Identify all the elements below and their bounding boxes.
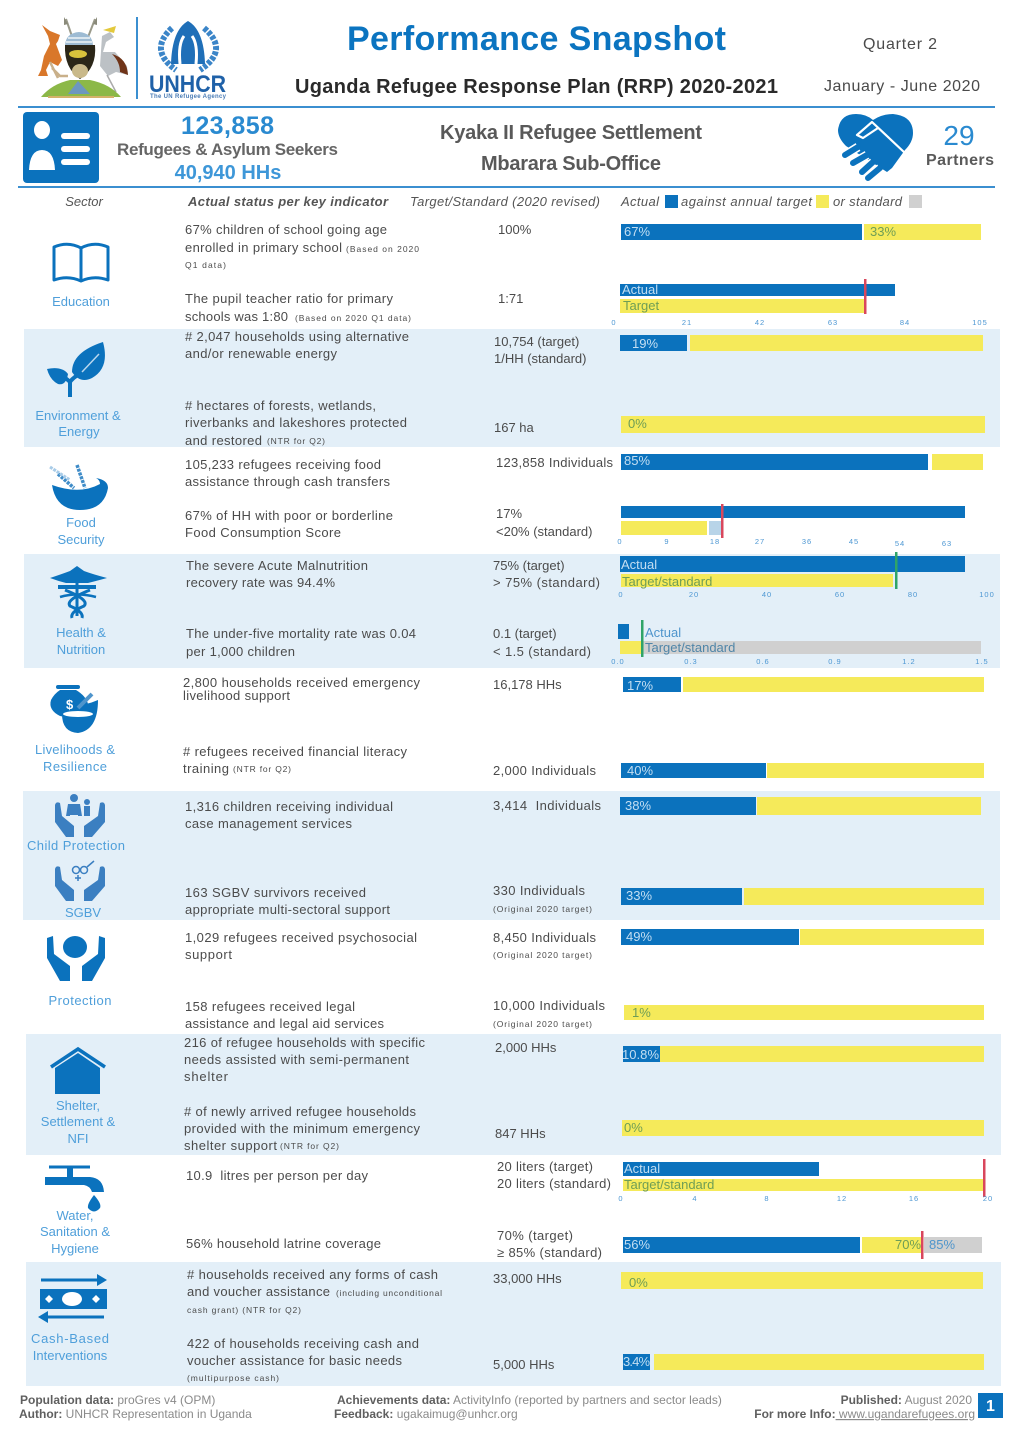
indicators: Education: (Based on 2020 — [346, 244, 419, 254]
targets: Health & Nutrition: 0.1 (target) — [493, 626, 557, 641]
chart: litres per person — [618, 1159, 993, 1203]
icon: water tap — [49, 1166, 90, 1168]
sector: Shelter: Settlement & — [41, 1114, 116, 1129]
sector: Shelter — [41, 1049, 116, 1146]
sector: Education: Education — [52, 294, 110, 309]
chart: under-five mortality: 1.2 — [902, 657, 916, 666]
indicators: Child Protection and SGBV: 163 SGBV survivors received — [185, 885, 366, 900]
rule bottom — [18, 186, 995, 188]
chart: SAM recovery rate: 80 — [908, 590, 918, 599]
logo: UNHCR: UNHCR — [149, 71, 226, 98]
targets: Environment & Energy: 1/HH (standard) — [494, 351, 586, 366]
chart: legal assistance bar — [624, 1005, 984, 1020]
indicators: WASH: 56% household latrine coverage — [186, 1236, 381, 1251]
icon: caduceus — [50, 566, 107, 583]
population figures: 40,940 HHs — [175, 162, 281, 184]
indicators: Environment & Energy: and/or renewable energy — [185, 346, 338, 361]
population figures: Refugees & Asylum Seekers — [117, 140, 338, 159]
panel: cash band — [26, 1262, 1001, 1386]
indicators: Education — [185, 222, 419, 324]
footer: achievements and feedback: Achievements data: ActivityInfo (reported by partners and sector leads) — [337, 1393, 722, 1407]
indicators: Cash-Based Interventions: # households received any forms of cash — [187, 1267, 438, 1282]
sector: Shelter: NFI — [68, 1131, 88, 1146]
icon: bowl with grain — [52, 478, 108, 510]
targets: Child Protection and SGBV: (Original 2020 target) — [493, 904, 592, 914]
chart: under-five mortality: 1.5 — [975, 657, 989, 666]
targets: Education — [498, 222, 532, 306]
targets: Cash-Based Interventions — [493, 1271, 562, 1372]
chart: under-five mortality: 0.6 — [756, 657, 770, 666]
sector: SGBV: SGBV — [65, 905, 101, 920]
chart: food consumption score: 9 — [664, 537, 670, 546]
chart: legal assistance bar: 1% — [632, 1005, 651, 1020]
chart: pupil teacher ratio: Actual — [622, 282, 658, 297]
chart: SGBV support bar: 33% — [626, 888, 652, 903]
indicators: Livelihoods — [183, 675, 420, 776]
sector: Environment & Energy — [35, 342, 121, 439]
chart: emergency support bar: 17% — [627, 678, 653, 693]
chart: litres per person: 8 — [764, 1194, 770, 1203]
partners: Partners — [926, 152, 994, 169]
panel: environment band — [24, 329, 1000, 447]
chart: SAM recovery rate: 60 — [835, 590, 845, 599]
footer: publication — [754, 1393, 975, 1421]
chart: food assistance bar — [621, 453, 983, 470]
indicators: Environment & Energy — [185, 329, 409, 448]
indicators: Livelihoods: # refugees received financial literacy — [183, 744, 408, 759]
chart: under-five mortality: 0.9 — [828, 657, 842, 666]
panel: health band — [24, 554, 1000, 668]
icon: banknote and arrows — [41, 1278, 100, 1282]
indicators: Environment & Energy: # 2,047 households using alternative — [185, 329, 409, 344]
panel: shelter band — [26, 1034, 1001, 1155]
indicators: Food Security: 67% of HH with poor or borderline — [185, 508, 393, 523]
chart: cash assistance bar — [621, 1272, 983, 1290]
icon: hands and gender symbols — [55, 866, 74, 901]
targets: Shelter — [495, 1040, 557, 1141]
chart: SGBV support bar — [621, 888, 984, 905]
chart: renewable energy bar — [620, 335, 983, 351]
targets: Child Protection and SGBV: 3,414 Individuals — [493, 798, 602, 813]
period: January - June 2020 — [824, 78, 980, 95]
targets: Food Security: 17% — [496, 506, 522, 521]
population figures: 123,858 — [181, 112, 274, 140]
chart: SAM recovery rate: 0 — [618, 590, 624, 599]
settlement name — [440, 122, 702, 175]
indicators: Livelihoods: training — [183, 761, 229, 776]
footer: publication: Published: August 2020 — [841, 1393, 972, 1407]
table header: Target/Standard (2020 revised) — [410, 194, 600, 209]
chart: financial literacy bar — [621, 763, 984, 778]
sector: Child Protection — [27, 794, 125, 853]
chart: food assistance bar: 85% — [624, 453, 650, 468]
sector: WASH — [40, 1167, 110, 1256]
icon: book — [54, 244, 108, 281]
sector: Protection: Protection — [48, 993, 112, 1008]
indicators: Health & Nutrition: per 1,000 children — [186, 644, 295, 659]
chart: latrine coverage: 85% — [929, 1237, 955, 1252]
logo: Uganda coat of arms — [38, 17, 128, 97]
chart: food consumption score: 63 — [942, 539, 952, 548]
indicators: Protection — [185, 930, 417, 1031]
sector: Food Security: Security — [58, 532, 105, 547]
indicators: Food Security: 105,233 refugees receiving food — [185, 457, 381, 472]
chart: basic needs bar: 3.4% — [623, 1354, 650, 1369]
sector: Child Protection: Child Protection — [27, 838, 125, 853]
chart: cash assistance bar: 0% — [629, 1275, 648, 1290]
targets: Protection: 10,000 Individuals — [493, 998, 606, 1013]
targets: Cash-Based Interventions: 5,000 HHs — [493, 1357, 555, 1372]
sector: Livelihoods & Resilience — [35, 685, 115, 774]
sector: WASH: Water, — [56, 1208, 94, 1223]
chart: food consumption score — [617, 504, 965, 548]
targets: Protection: (Original 2020 target) — [493, 950, 592, 960]
footer: publication: For more Info: www.ugandarefugees.org — [754, 1407, 975, 1421]
chart: under-five mortality: Target/standard — [645, 640, 735, 655]
chart: enrolment bar: 33% — [870, 224, 896, 239]
chart: latrine coverage — [623, 1231, 982, 1259]
sector: Education — [52, 244, 110, 309]
table header: or standard — [833, 194, 903, 209]
chart: latrine coverage: 56% — [624, 1237, 650, 1252]
chart: psychosocial bar: 49% — [626, 929, 652, 944]
chart: SAM recovery rate: 100 — [979, 590, 995, 599]
indicators: Environment & Energy: riverbanks and lakeshores protected — [185, 415, 407, 430]
icon: plant — [62, 372, 84, 397]
chart: SAM recovery rate: 20 — [689, 590, 699, 599]
chart: litres per person: Actual — [624, 1161, 660, 1176]
targets: Shelter: 847 HHs — [495, 1126, 546, 1141]
chart: pupil teacher ratio: 63 — [828, 318, 838, 327]
targets: Health & Nutrition: < 1.5 (standard) — [493, 644, 591, 659]
indicators: Cash-Based Interventions: 422 of households receiving cash and — [187, 1336, 419, 1351]
indicators: Environment & Energy: and restored — [185, 433, 262, 448]
indicators: Cash-Based Interventions: (multipurpose cash) — [187, 1373, 279, 1383]
indicators: Protection: assistance and legal aid services — [185, 1016, 384, 1031]
targets: Child Protection and SGBV: 330 Individuals — [493, 883, 586, 898]
chart: SAM recovery rate: Target/standard — [622, 574, 712, 589]
chart: food consumption score: 27 — [755, 537, 765, 546]
chart: financial literacy bar: 40% — [627, 763, 653, 778]
title: Performance Snapshot — [347, 20, 726, 58]
table header: Actual — [620, 194, 660, 209]
sector: Livelihoods & Resilience: $ — [66, 697, 74, 712]
chart: semi-permanent shelter bar — [622, 1046, 984, 1062]
targets: Livelihoods — [493, 677, 596, 778]
targets: Food Security: 123,858 Individuals — [496, 455, 614, 470]
icon: hands and children — [55, 802, 74, 837]
chart: food consumption score: 54 — [895, 539, 905, 548]
indicators: Protection: support — [185, 947, 232, 962]
chart: case management bar — [620, 797, 981, 815]
indicators: Child Protection and SGBV: appropriate multi-sectoral support — [185, 902, 390, 917]
indicators: Livelihoods: (NTR for Q2) — [233, 764, 291, 774]
logo: UNHCR: The UN Refugee Agency — [150, 94, 227, 100]
indicators: Health & Nutrition: The under-five mortality rate was 0.04 — [186, 626, 416, 641]
indicators: Health & Nutrition: recovery rate was 94.4% — [186, 575, 335, 590]
chart: food consumption score: 45 — [849, 537, 859, 546]
indicators: Cash-Based Interventions — [187, 1267, 442, 1383]
sector: Health & Nutrition: Nutrition — [57, 642, 105, 657]
indicators: Cash-Based Interventions: voucher assistance for basic needs — [187, 1353, 402, 1368]
sector: Protection — [47, 936, 112, 1008]
partners — [926, 120, 994, 169]
chart: litres per person: Target/standard — [624, 1177, 714, 1192]
targets: Livelihoods: 2,000 Individuals — [493, 763, 596, 778]
panel: child protection band — [23, 791, 1000, 920]
quarter: Quarter 2 — [863, 36, 937, 53]
partners: 29 — [943, 120, 975, 151]
targets: Shelter: 2,000 HHs — [495, 1040, 557, 1055]
indicators: Child Protection and SGBV: case management services — [185, 816, 352, 831]
sector: Cash-Based Interventions: Interventions — [33, 1348, 108, 1363]
chart: hectares bar: 0% — [628, 416, 647, 431]
chart: semi-permanent shelter bar: 10.8% — [622, 1047, 659, 1062]
indicators: Education: schools was 1:80 — [185, 309, 288, 324]
page number — [978, 1393, 1003, 1418]
sector: Health & Nutrition: Health & — [56, 625, 106, 640]
indicators: Shelter: needs assisted with semi-permanent — [184, 1052, 409, 1067]
indicators: Shelter: shelter support — [184, 1138, 277, 1153]
footer: achievements and feedback: Feedback: ugakaimug@unhcr.org — [334, 1407, 518, 1421]
sector: WASH: Hygiene — [51, 1241, 99, 1256]
indicators: Livelihoods: 2,800 households received emergency — [183, 675, 420, 690]
targets: Food Security — [496, 455, 614, 539]
indicators: Health & Nutrition — [186, 558, 416, 659]
indicators: Child Protection and SGBV: 1,316 children receiving individual — [185, 799, 393, 814]
chart: enrolment bar: 67% — [624, 224, 650, 239]
chart: pupil teacher ratio: 84 — [900, 318, 910, 327]
chart: pupil teacher ratio: 105 — [972, 318, 988, 327]
indicators: Education: enrolled in primary school — [185, 240, 342, 255]
targets: Health & Nutrition: > 75% (standard) — [493, 575, 600, 590]
icon: person card — [23, 112, 99, 183]
chart: food consumption score: 36 — [802, 537, 812, 546]
table header: Actual status per key indicator — [187, 194, 389, 209]
sector: Food Security — [50, 465, 108, 547]
sector: Environment & Energy: Energy — [58, 424, 100, 439]
subtitle: Uganda Refugee Response Plan (RRP) 2020-2021 — [295, 76, 778, 98]
indicators: Food Security: assistance through cash transfers — [185, 474, 390, 489]
sector: Environment & Energy: Environment & — [35, 408, 121, 423]
indicators: WASH — [186, 1168, 381, 1251]
footer: data sources: Author: UNHCR Representation in Uganda — [19, 1407, 252, 1421]
indicators: Protection: 1,029 refugees received psychosocial — [185, 930, 417, 945]
sector: Shelter: Shelter, — [56, 1098, 100, 1113]
chart: hectares bar — [621, 416, 985, 433]
indicators: Shelter — [184, 1035, 426, 1153]
sector: Cash-Based Interventions — [31, 1274, 109, 1363]
targets: Protection: (Original 2020 target) — [493, 1019, 592, 1029]
chart: under-five mortality: 0.3 — [684, 657, 698, 666]
targets: Environment & Energy — [494, 334, 586, 435]
population figures — [117, 112, 338, 184]
indicators: Health & Nutrition: The severe Acute Malnutrition — [186, 558, 368, 573]
chart: SAM recovery rate: Actual — [621, 557, 657, 572]
table header: Sector — [65, 194, 103, 209]
chart: SAM recovery rate — [618, 552, 995, 599]
targets: Cash-Based Interventions: 33,000 HHs — [493, 1271, 562, 1286]
sector: WASH: Sanitation & — [40, 1224, 110, 1239]
indicators: Shelter: (NTR for Q2) — [280, 1141, 339, 1151]
sector: Livelihoods & Resilience: Livelihoods & — [35, 742, 115, 757]
targets: Health & Nutrition: 75% (target) — [493, 558, 565, 573]
indicators: Cash-Based Interventions: (including unconditional — [336, 1288, 442, 1298]
indicators: Education: (Based on 2020 Q1 data) — [295, 313, 411, 323]
rule top — [18, 106, 995, 108]
sector: SGBV — [55, 861, 105, 920]
indicators: WASH: 10.9 litres per person per day — [186, 1168, 368, 1183]
targets: WASH: 20 liters (target) — [497, 1159, 593, 1174]
indicators: Environment & Energy: (NTR for Q2) — [267, 436, 325, 446]
chart: litres per person: 4 — [692, 1194, 698, 1203]
chart: under-five mortality: Actual — [645, 625, 681, 640]
chart: pupil teacher ratio: 42 — [755, 318, 765, 327]
targets: WASH: ≥ 85% (standard) — [497, 1245, 602, 1260]
icon: house — [51, 1049, 105, 1067]
targets: WASH: 20 liters (standard) — [497, 1176, 611, 1191]
chart: pupil teacher ratio: 0 — [611, 318, 617, 327]
chart: pupil teacher ratio: 21 — [682, 318, 692, 327]
targets: Child Protection and SGBV — [493, 798, 602, 914]
targets: WASH — [497, 1159, 611, 1260]
indicators: Child Protection and SGBV — [185, 799, 393, 917]
indicators: Shelter: 216 of refugee households with specific — [184, 1035, 426, 1050]
sector: Health & Nutrition — [50, 566, 107, 657]
indicators: Shelter: # of newly arrived refugee households — [184, 1104, 416, 1119]
settlement name: Kyaka II Refugee Settlement — [440, 122, 702, 144]
targets: Food Security: <20% (standard) — [496, 524, 592, 539]
chart: under-five mortality — [611, 620, 989, 666]
indicators: Food Security — [185, 457, 393, 540]
settlement name: Mbarara Sub-Office — [481, 153, 661, 175]
indicators: Shelter: shelter — [184, 1069, 229, 1084]
indicators: Education: 67% children of school going age — [185, 222, 387, 237]
chart: emergency support bar — [623, 677, 984, 693]
divider between logos — [136, 17, 138, 99]
sector: Cash-Based Interventions: Cash-Based — [31, 1331, 109, 1346]
chart: pupil teacher ratio — [611, 279, 988, 327]
table header: against annual target — [681, 194, 813, 209]
footer: data sources: Population data: proGres v4 (OPM) — [20, 1393, 215, 1407]
targets: Environment & Energy: 167 ha — [494, 420, 535, 435]
chart: litres per person: 0 — [618, 1194, 624, 1203]
indicators: Environment & Energy: # hectares of forests, wetlands, — [185, 398, 376, 413]
chart: food consumption score: 18 — [710, 537, 720, 546]
indicators: Livelihoods: livelihood support — [183, 688, 290, 703]
targets: Education: 1:71 — [498, 291, 523, 306]
targets: Education: 100% — [498, 222, 532, 237]
indicators: Education: Q1 data) — [185, 260, 226, 270]
chart: case management bar: 38% — [625, 798, 651, 813]
page number: 1 — [986, 1398, 995, 1415]
indicators: Cash-Based Interventions: cash grant) (NTR for Q2) — [187, 1305, 301, 1315]
indicators: Food Security: Food Consumption Score — [185, 525, 341, 540]
chart: emergency shelter bar: 0% — [624, 1120, 643, 1135]
chart: emergency shelter bar — [622, 1120, 984, 1136]
chart: basic needs bar — [623, 1354, 984, 1370]
indicators: Protection: 158 refugees received legal — [185, 999, 355, 1014]
targets: Environment & Energy: 10,754 (target) — [494, 334, 579, 349]
sector: Livelihoods & Resilience: Resilience — [43, 759, 107, 774]
footer: achievements and feedback — [334, 1393, 722, 1421]
targets: WASH: 70% (target) — [497, 1228, 573, 1243]
indicators: Education: The pupil teacher ratio for primary — [185, 291, 394, 306]
sector: Food Security: Food — [66, 515, 96, 530]
chart: litres per person: 16 — [909, 1194, 919, 1203]
targets: Protection — [493, 930, 606, 1029]
chart: food consumption score: 0 — [617, 537, 623, 546]
icon: handshake heart — [838, 114, 913, 178]
chart: renewable energy bar: 19% — [632, 336, 658, 351]
footer: data sources — [19, 1393, 252, 1421]
chart: under-five mortality: 0.0 — [611, 657, 625, 666]
targets: Health & Nutrition — [493, 558, 600, 659]
chart: litres per person: 12 — [837, 1194, 847, 1203]
targets: Livelihoods: 16,178 HHs — [493, 677, 562, 692]
chart: pupil teacher ratio: Target — [623, 298, 660, 313]
chart: litres per person: 20 — [983, 1194, 993, 1203]
logo: UNHCR — [149, 21, 227, 100]
targets: Protection: 8,450 Individuals — [493, 930, 596, 945]
chart: psychosocial bar — [621, 929, 984, 945]
chart: SAM recovery rate: 40 — [762, 590, 772, 599]
indicators: Shelter: provided with the minimum emergency — [184, 1121, 420, 1136]
icon: hands protecting person — [47, 936, 70, 981]
table header — [65, 194, 922, 209]
chart: latrine coverage: 70% — [895, 1237, 921, 1252]
icon: money bag and bowl — [56, 685, 80, 689]
indicators: Cash-Based Interventions: and voucher assistance — [187, 1284, 330, 1299]
chart: enrolment bar — [621, 224, 981, 240]
